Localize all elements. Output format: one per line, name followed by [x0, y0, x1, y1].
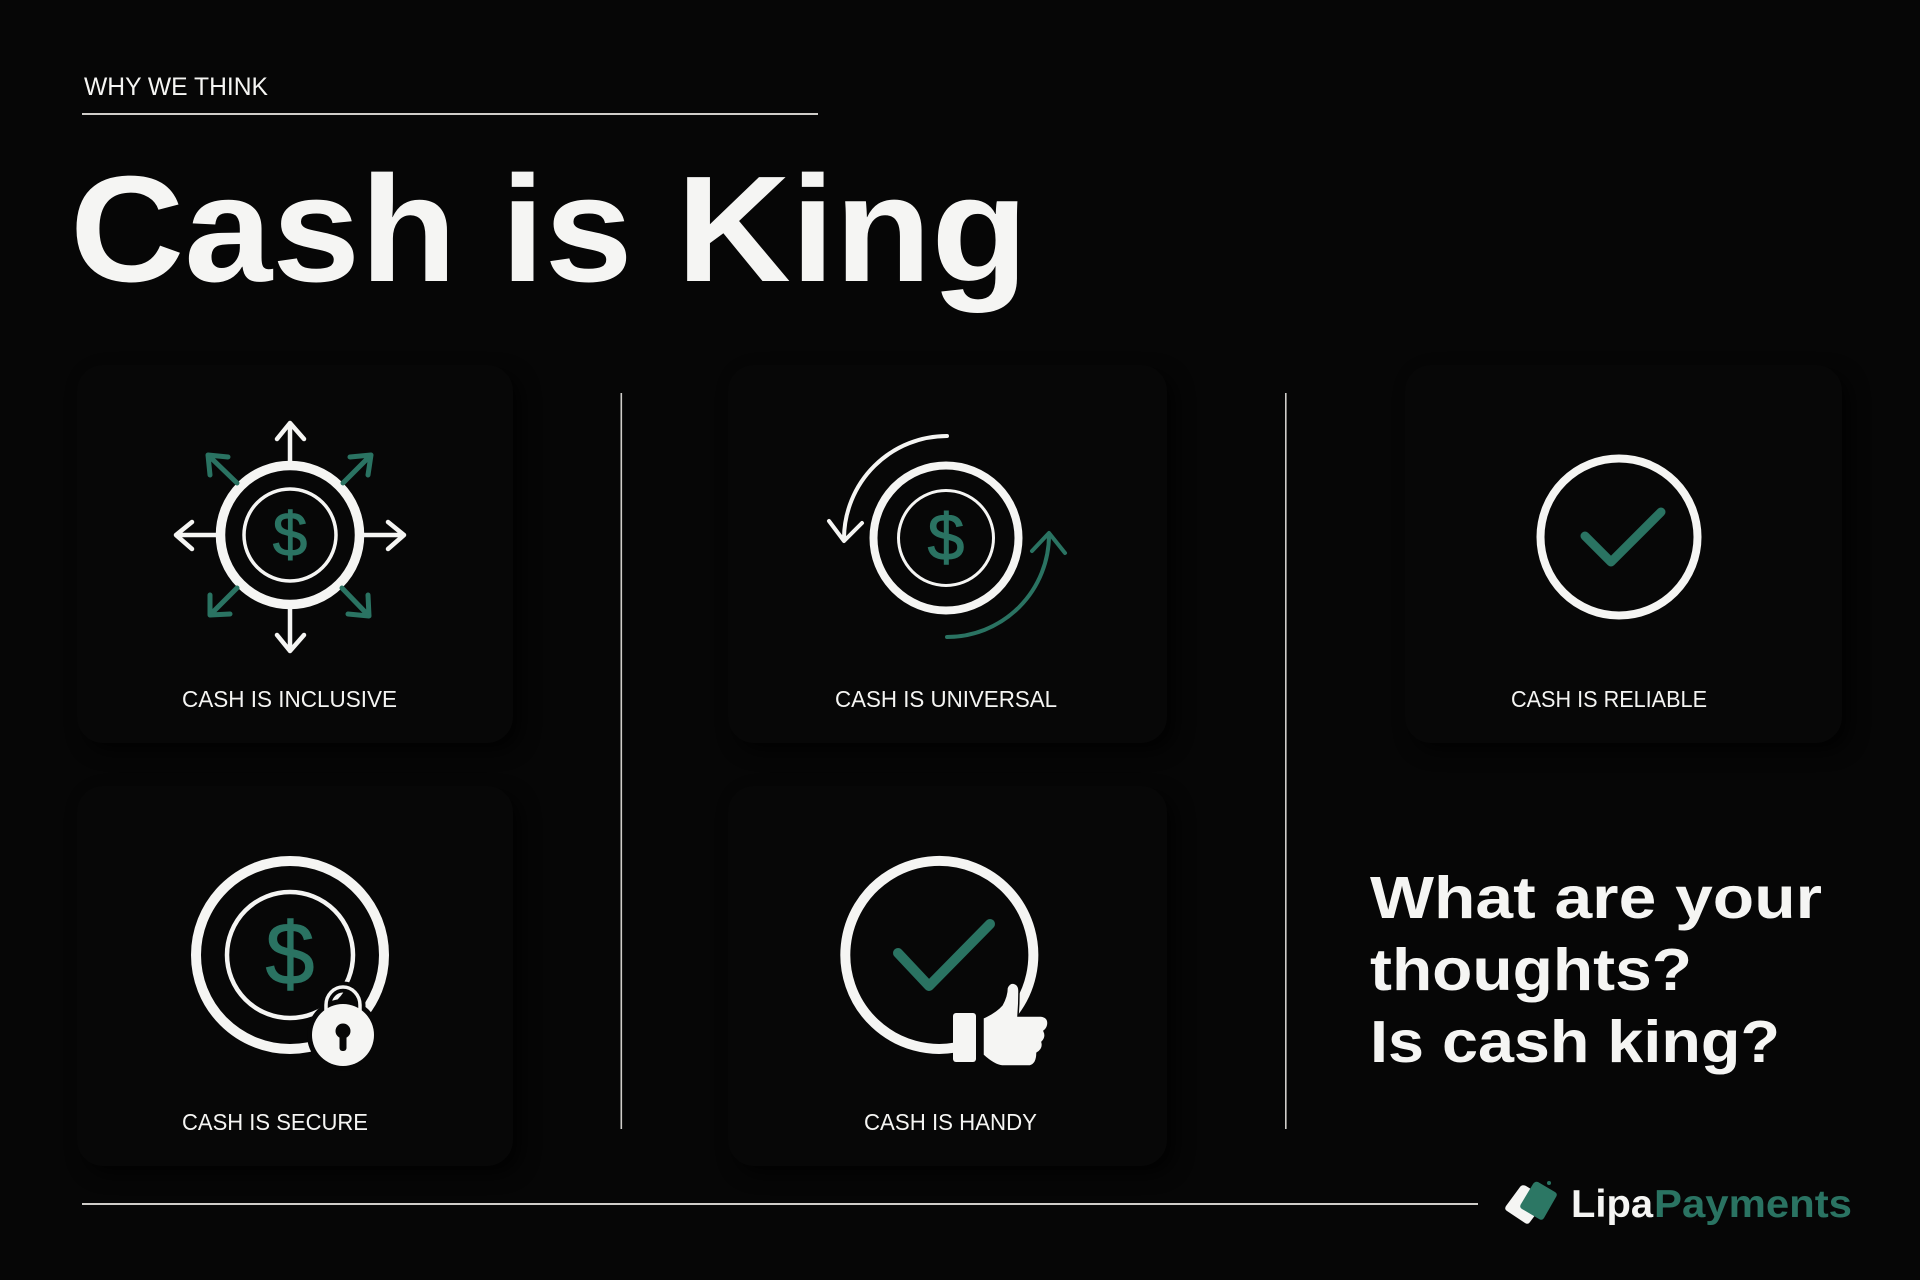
- label: CASH IS RELIABLE: [1511, 686, 1707, 712]
- logo: LipaPayments: Lipa: [1571, 1183, 1653, 1226]
- label: CASH IS HANDY: [864, 1109, 1037, 1135]
- icon: dollar coin with rotating arrows: $: [928, 500, 964, 574]
- icon: check in circle: [1540, 458, 1698, 616]
- panel: cash is inclusive: [77, 365, 513, 743]
- panel: cash is universal: [728, 365, 1167, 743]
- icon: dollar coin with padlock: $: [266, 904, 314, 1003]
- label: CASH IS UNIVERSAL: [835, 686, 1057, 712]
- call to action text: Is cash king?: [1370, 1009, 1780, 1075]
- panel: cash is handy: [728, 786, 1167, 1166]
- call to action text: [1370, 865, 1822, 1075]
- label: CASH IS SECURE: [182, 1109, 368, 1135]
- panel: cash is reliable: [1405, 365, 1842, 743]
- call to action text: thoughts?: [1370, 937, 1692, 1003]
- icon: logo cards: [1505, 1181, 1557, 1224]
- eyebrow heading: WHY WE THINK: [84, 73, 268, 101]
- icon: dollar coin with outward arrows: $: [273, 501, 307, 570]
- icon: dollar coin with outward arrows: [176, 423, 404, 651]
- icon: dollar coin with rotating arrows: [829, 436, 1065, 637]
- panel: cash is secure: [77, 786, 513, 1166]
- icon: dollar coin with padlock: [196, 861, 384, 1071]
- label: CASH IS INCLUSIVE: [182, 686, 397, 712]
- logo: LipaPayments: [1505, 1181, 1852, 1226]
- call to action text: What are your: [1370, 865, 1822, 931]
- icon: check with thumbs up: [845, 861, 1048, 1066]
- logo: LipaPayments: Payments: [1654, 1183, 1852, 1226]
- title: Cash is King: [70, 144, 1028, 313]
